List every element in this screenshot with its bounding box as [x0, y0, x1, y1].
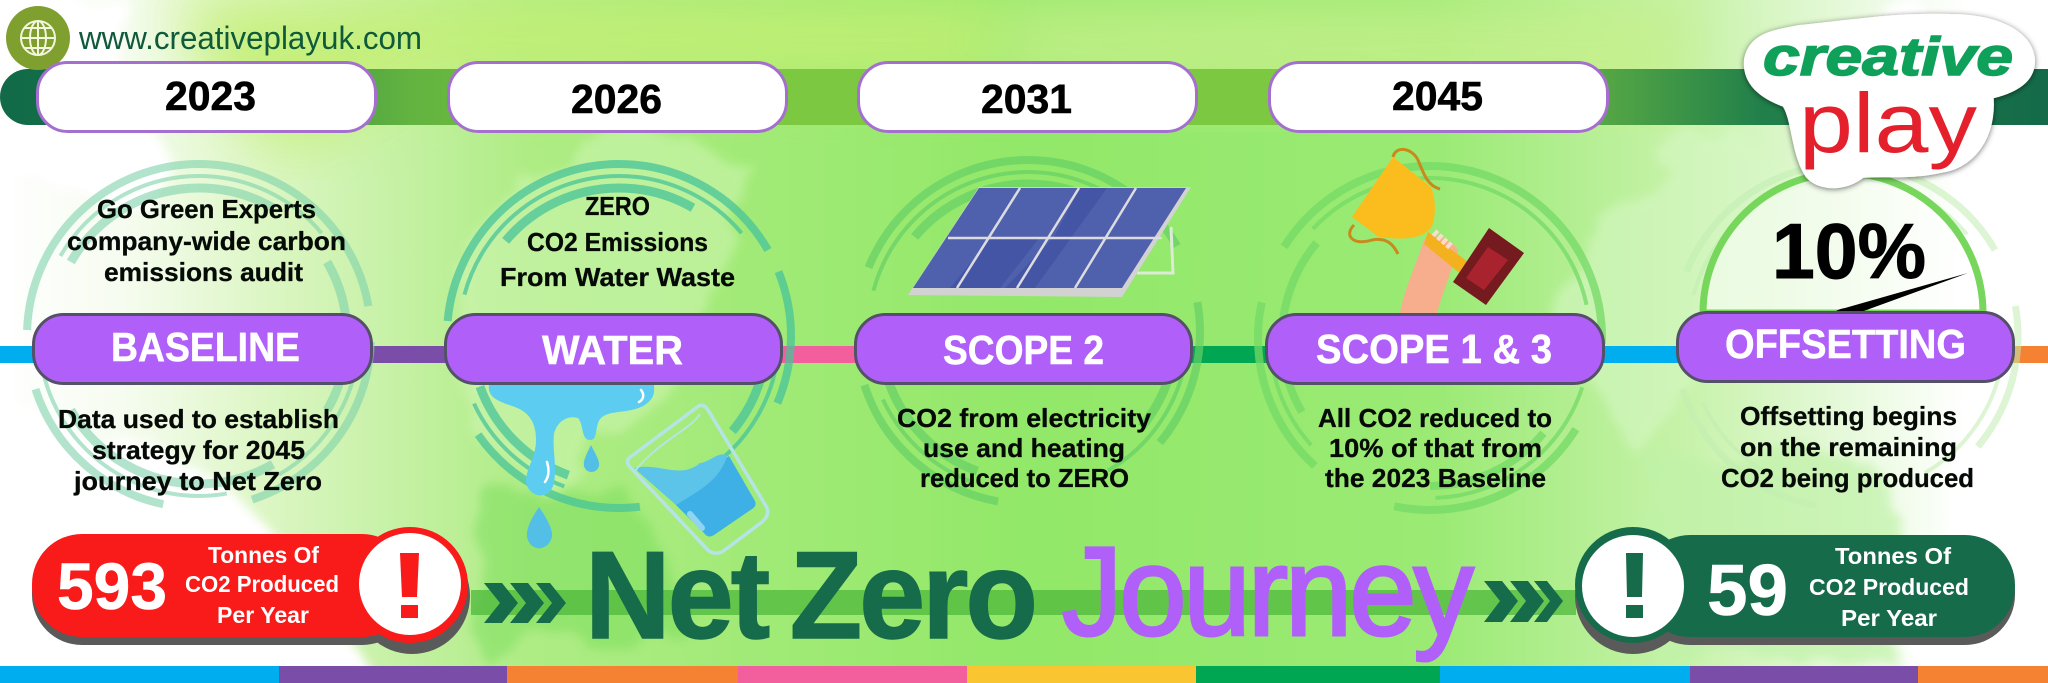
gauge dial — [1703, 173, 1983, 313]
description: CO2 from electricity — [897, 403, 1152, 433]
intro text: company-wide carbon — [67, 226, 346, 256]
year pill — [448, 62, 786, 132]
heading pill — [446, 314, 782, 384]
description: the 2023 Baseline — [1325, 463, 1546, 493]
top ribbon band — [0, 69, 2048, 125]
panel: 2045 scope 1 and 3 — [1258, 62, 1608, 510]
panel: 2026 water — [446, 62, 791, 553]
concentric arcs — [856, 160, 1200, 504]
description: reduced to ZERO — [920, 463, 1129, 493]
description: CO2 being produced — [1721, 463, 1974, 493]
callout label: Per Year — [1841, 605, 1937, 631]
intro text: emissions audit — [104, 257, 303, 287]
callout label — [185, 542, 339, 628]
website address: www.creativeplayuk.com — [78, 20, 422, 56]
year: 2026 — [571, 76, 662, 122]
description — [58, 404, 339, 496]
year pill — [858, 62, 1196, 132]
panel: offsetting gauge — [1674, 164, 2018, 508]
timeline connector segments — [0, 346, 2048, 363]
panel: 2023 baseline — [27, 62, 376, 508]
icon: solar panel — [908, 187, 1191, 297]
description: Offsetting begins — [1740, 401, 1957, 431]
arrow: left chevrons — [484, 583, 566, 623]
title: Net Zero: Net Zero — [585, 527, 1035, 665]
logo word creative: creative — [1763, 27, 2013, 87]
heading: WATER — [542, 327, 683, 373]
callout shadow — [32, 538, 470, 654]
logo: creative play — [1752, 22, 2027, 180]
icon: exclamation — [1582, 535, 1684, 637]
icon: globe — [6, 6, 70, 70]
year pill — [1270, 62, 1608, 132]
heading pill — [34, 314, 372, 384]
title: Journey: Journey — [1062, 521, 1474, 662]
description: strategy for 2045 — [92, 435, 305, 465]
callout: 59 tonnes — [1575, 527, 2015, 654]
year: 2045 — [1392, 73, 1483, 119]
intro text — [67, 194, 346, 287]
gauge percentage: 10% — [1772, 207, 1926, 295]
description — [1318, 403, 1552, 493]
heading: OFFSETTING — [1725, 321, 1966, 367]
callout label: CO2 Produced — [1809, 574, 1969, 600]
bottom colour bar — [0, 666, 2048, 683]
description: on the remaining — [1740, 432, 1957, 462]
heading: SCOPE 1 & 3 — [1316, 326, 1552, 372]
concentric arcs — [27, 164, 371, 508]
description: Data used to establish — [58, 404, 339, 434]
callout shadow — [1575, 538, 2015, 654]
description — [897, 403, 1152, 493]
heading: SCOPE 2 — [943, 327, 1104, 373]
title band with arrows — [471, 581, 1576, 623]
logo white sticker — [1752, 22, 2027, 180]
icon: glass of water — [628, 405, 768, 553]
heading pill — [1266, 314, 1604, 384]
intro text: From Water Waste — [500, 262, 735, 292]
number: 59 — [1707, 551, 1788, 631]
callout: 593 tonnes — [32, 527, 470, 654]
year: 2023 — [165, 73, 256, 119]
concentric arcs — [1258, 166, 1602, 510]
callout label — [1809, 543, 1969, 631]
callout label: CO2 Produced — [185, 571, 339, 597]
description: use and heating — [923, 433, 1125, 463]
heading pill — [856, 314, 1192, 384]
heading: BASELINE — [111, 324, 300, 370]
icon: raised trophy — [1350, 149, 1524, 313]
intro text — [500, 191, 735, 292]
intro text: ZERO — [585, 191, 650, 221]
intro text: CO2 Emissions — [527, 227, 708, 257]
logo word play: play — [1799, 76, 1977, 170]
callout label: Tonnes Of — [208, 542, 319, 568]
year pill — [38, 62, 376, 132]
callout body — [32, 527, 468, 643]
year: 2031 — [981, 76, 1072, 122]
panel: 2031 scope 2 — [856, 62, 1200, 504]
arrow: right chevrons — [1484, 581, 1563, 622]
description: All CO2 reduced to — [1318, 403, 1552, 433]
icon: water spill — [489, 385, 654, 548]
description: journey to Net Zero — [73, 466, 322, 496]
description — [1721, 401, 1974, 493]
callout label: Per Year — [217, 602, 309, 628]
concentric arcs — [447, 164, 791, 508]
number: 593 — [57, 549, 167, 623]
description: 10% of that from — [1329, 433, 1542, 463]
icon: exclamation — [359, 533, 461, 635]
website link with globe icon — [6, 6, 422, 70]
faint outer arcs — [1674, 164, 2018, 508]
callout body — [1575, 527, 2015, 643]
gauge needle — [1833, 273, 1968, 316]
heading pill — [1678, 312, 2014, 382]
intro text: Go Green Experts — [97, 194, 316, 224]
callout label: Tonnes Of — [1835, 543, 1951, 569]
